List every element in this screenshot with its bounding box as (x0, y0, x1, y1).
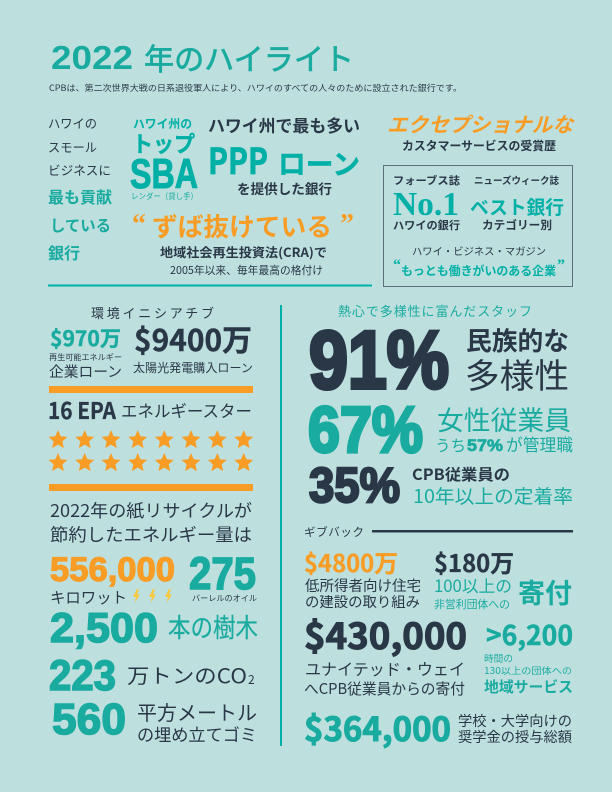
stat: 91 percent (309, 315, 569, 406)
top SBA lender: トップ (132, 127, 195, 159)
outstanding rating: 2005年以来、毎年最高の格付け (170, 262, 323, 278)
heading: environmental initiatives: 環境イニシアチブ (91, 303, 214, 322)
stat: 67 percent: うち (435, 434, 466, 456)
title: 年のハイライト (144, 35, 354, 79)
stat: 67 percent: 57% (467, 436, 503, 455)
stat: community service hours: 130以上の団体への (484, 663, 572, 677)
stat: barrels of oil: バーレルのオイル (192, 593, 257, 604)
top SBA lender: レンダー（貸し手） (131, 191, 198, 202)
heading: give back: ギブバック (304, 524, 364, 540)
stat: kilowatts (50, 551, 175, 608)
text block: small business: ビジネスに (48, 160, 111, 179)
text block: small business: している (50, 214, 111, 236)
top SBA lender (130, 115, 198, 202)
recycling heading (50, 498, 253, 547)
panel: awards box: “ (393, 257, 401, 274)
top SBA lender: ハワイ州の (133, 115, 192, 132)
stat: scholarships: $364,000 (304, 703, 451, 751)
PPP loans: を提供した銀行 (237, 178, 332, 198)
stat: CO2 (49, 652, 255, 700)
text block: small business: 最も貢献 (48, 184, 112, 208)
PPP loans: PPP (208, 133, 268, 185)
top SBA lender: SBA (130, 150, 198, 197)
stat: trees: 本の樹木 (168, 607, 258, 644)
stat: 35 percent: CPB従業員の (412, 463, 510, 485)
stat: scholarships: 学校・大学向けの (458, 710, 572, 731)
panel: awards box: フォーブス誌 (393, 173, 461, 188)
stat: kilowatts: 556,000 (50, 551, 175, 589)
icon: lightning bolts (133, 589, 172, 603)
stat: 48 million: 低所得者向け住宅 (305, 575, 421, 596)
stat: landfill: の埋め立てゴミ (137, 721, 257, 746)
stat: landfill: 560 (52, 695, 126, 744)
panel: awards box: ベスト銀行 (470, 193, 564, 220)
text block: small business: 銀行 (48, 240, 80, 264)
stat: barrels of oil: 275 (189, 548, 256, 599)
stat: 430000: へCPB従業員からの寄付 (304, 678, 465, 699)
stat: 430000: ユナイテッド・ウェイ (305, 656, 465, 680)
text block: small business (48, 113, 112, 264)
stat: 9.7 million: $970万 (50, 323, 121, 353)
stat: scholarships: 奨学金の授与総額 (458, 726, 572, 747)
outstanding rating (132, 207, 354, 278)
stat: 1.8 million: 非営利団体への (434, 596, 510, 612)
recycling heading: 節約したエネルギー量は (50, 522, 252, 547)
exceptional customer service: カスタマーサービスの受賞歴 (402, 137, 556, 154)
stat: 430000 (304, 608, 467, 699)
stat: 430000: $430,000 (304, 608, 467, 660)
recycling heading: 2022年の紙リサイクルが (50, 498, 253, 523)
title (51, 35, 354, 79)
stat: 67 percent (308, 393, 573, 466)
stat: trees (50, 604, 258, 651)
icons: stars (48, 430, 253, 471)
stat: 35 percent: 10年以上の定着率 (413, 482, 573, 509)
outstanding rating: 地域社会再生投資法(CRA)で (160, 242, 327, 261)
panel: awards box: No.1 (393, 186, 459, 223)
stat: CO2: 万トンのCO (127, 660, 247, 689)
stat: 67 percent: 67% (308, 393, 423, 466)
title: 2022 (51, 39, 133, 76)
stat: 91 percent: 民族的な (466, 321, 569, 358)
exceptional customer service: エクセプショナルな (387, 108, 576, 138)
stat: community service hours: >6,200 (486, 614, 573, 653)
stat: 91 percent: 91% (309, 315, 449, 406)
stat: community service hours (484, 614, 573, 697)
stat: 67 percent: が管理職 (506, 432, 573, 456)
stat: CO2: 2 (248, 671, 255, 688)
stat: 1.8 million: $180万 (434, 544, 514, 579)
stat: 35 percent (309, 459, 573, 513)
stat: 35 percent: 35% (309, 459, 400, 513)
outstanding rating: “ (132, 209, 146, 240)
stat: kilowatts: キロワット (50, 586, 127, 608)
subtitle: CPBは、第二次世界大戦の日系退役軍人により、ハワイのすべての人々のために設立された銀行です。 (49, 82, 462, 94)
panel: awards box: ハワイの銀行 (393, 217, 460, 233)
stat: 67 percent: 女性従業員 (437, 399, 571, 438)
outstanding rating: ずば抜けている (152, 207, 332, 244)
exceptional customer service (387, 108, 576, 154)
stat: 9.7 million: 企業ローン (49, 361, 122, 382)
stat: 94 million: $9400万 (134, 316, 252, 360)
panel: awards box: ハワイ・ビジネス・マガジン (412, 243, 546, 258)
stat: 91 percent: 多様性 (465, 349, 569, 398)
panel: awards box: ” (557, 257, 565, 274)
text block: small business: スモール (48, 137, 97, 156)
PPP loans (208, 112, 360, 198)
stat: 9.7 million (49, 323, 122, 382)
stat: community service hours: 時間の (484, 651, 513, 665)
stat: 9.7 million: 再生可能エネルギー (49, 352, 122, 363)
stat: community service hours: 地域サービス (484, 676, 573, 697)
stat: 48 million: $4800万 (304, 544, 398, 579)
stat: trees: 2,500 (50, 604, 158, 651)
energy star heading: 16 EPA (48, 392, 116, 426)
panel: awards box: カテゴリー別 (482, 217, 552, 233)
outstanding rating: ” (340, 209, 354, 240)
panel: awards box: もっとも働きがいのある企業 (401, 262, 556, 279)
stat: landfill: 平方メートル (137, 697, 257, 726)
stat: 1.8 million: 100以上の (434, 573, 512, 597)
text block: small business: ハワイの (48, 113, 97, 132)
stat: 48 million: の建設の取り組み (305, 591, 420, 612)
energy star heading: エネルギースター (121, 398, 252, 422)
panel: awards box (384, 166, 572, 286)
heading: diverse staff: 熱心で多様性に富んだスタッフ (338, 301, 532, 320)
panel: awards box: ニューズウィーク誌 (474, 173, 559, 187)
stat: CO2: 223 (49, 652, 116, 700)
stat: landfill (52, 695, 257, 746)
PPP loans: ローン (278, 143, 360, 183)
stat: 1.8 million (434, 544, 572, 612)
stat: 48 million (304, 544, 421, 612)
stat: 94 million: 太陽光発電購入ローン (133, 359, 253, 376)
energy star heading (48, 392, 252, 426)
stat: scholarships (304, 703, 572, 751)
stat: 1.8 million: 寄付 (518, 572, 572, 611)
PPP loans: ハワイ州で最も多い (208, 112, 360, 137)
